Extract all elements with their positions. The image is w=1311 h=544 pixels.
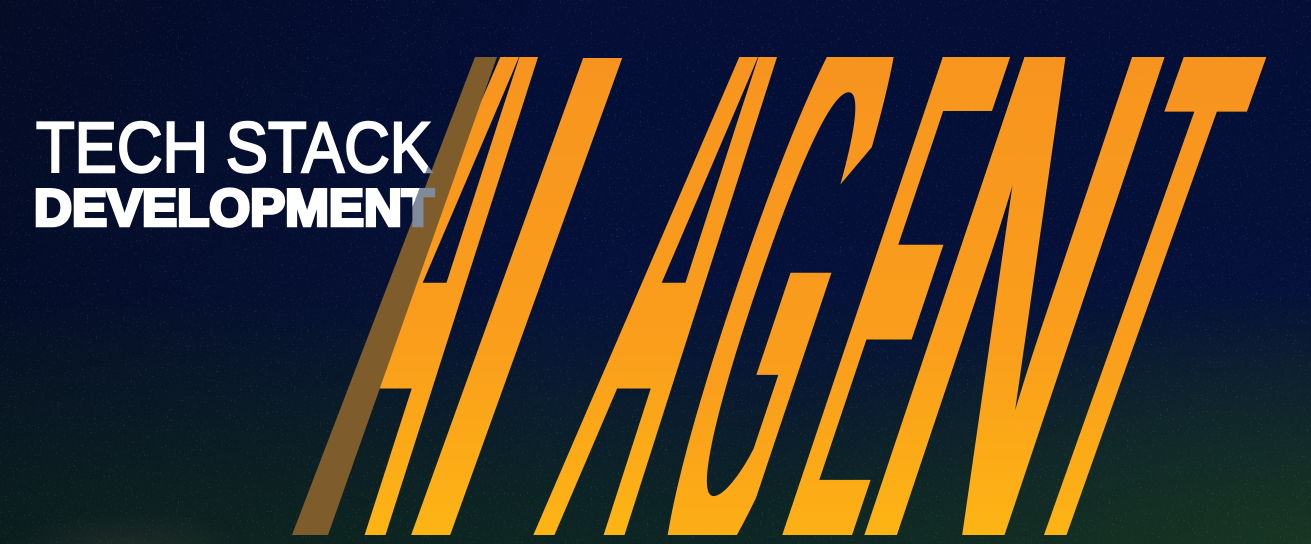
translucent slanted band: [292, 57, 497, 535]
subtitle: DEVELOPMENT: DEVELOPMENT: [34, 180, 434, 238]
big title: AI AGENT: [364, 57, 1266, 535]
subtitle: TECH STACK: TECH STACK: [36, 109, 432, 188]
